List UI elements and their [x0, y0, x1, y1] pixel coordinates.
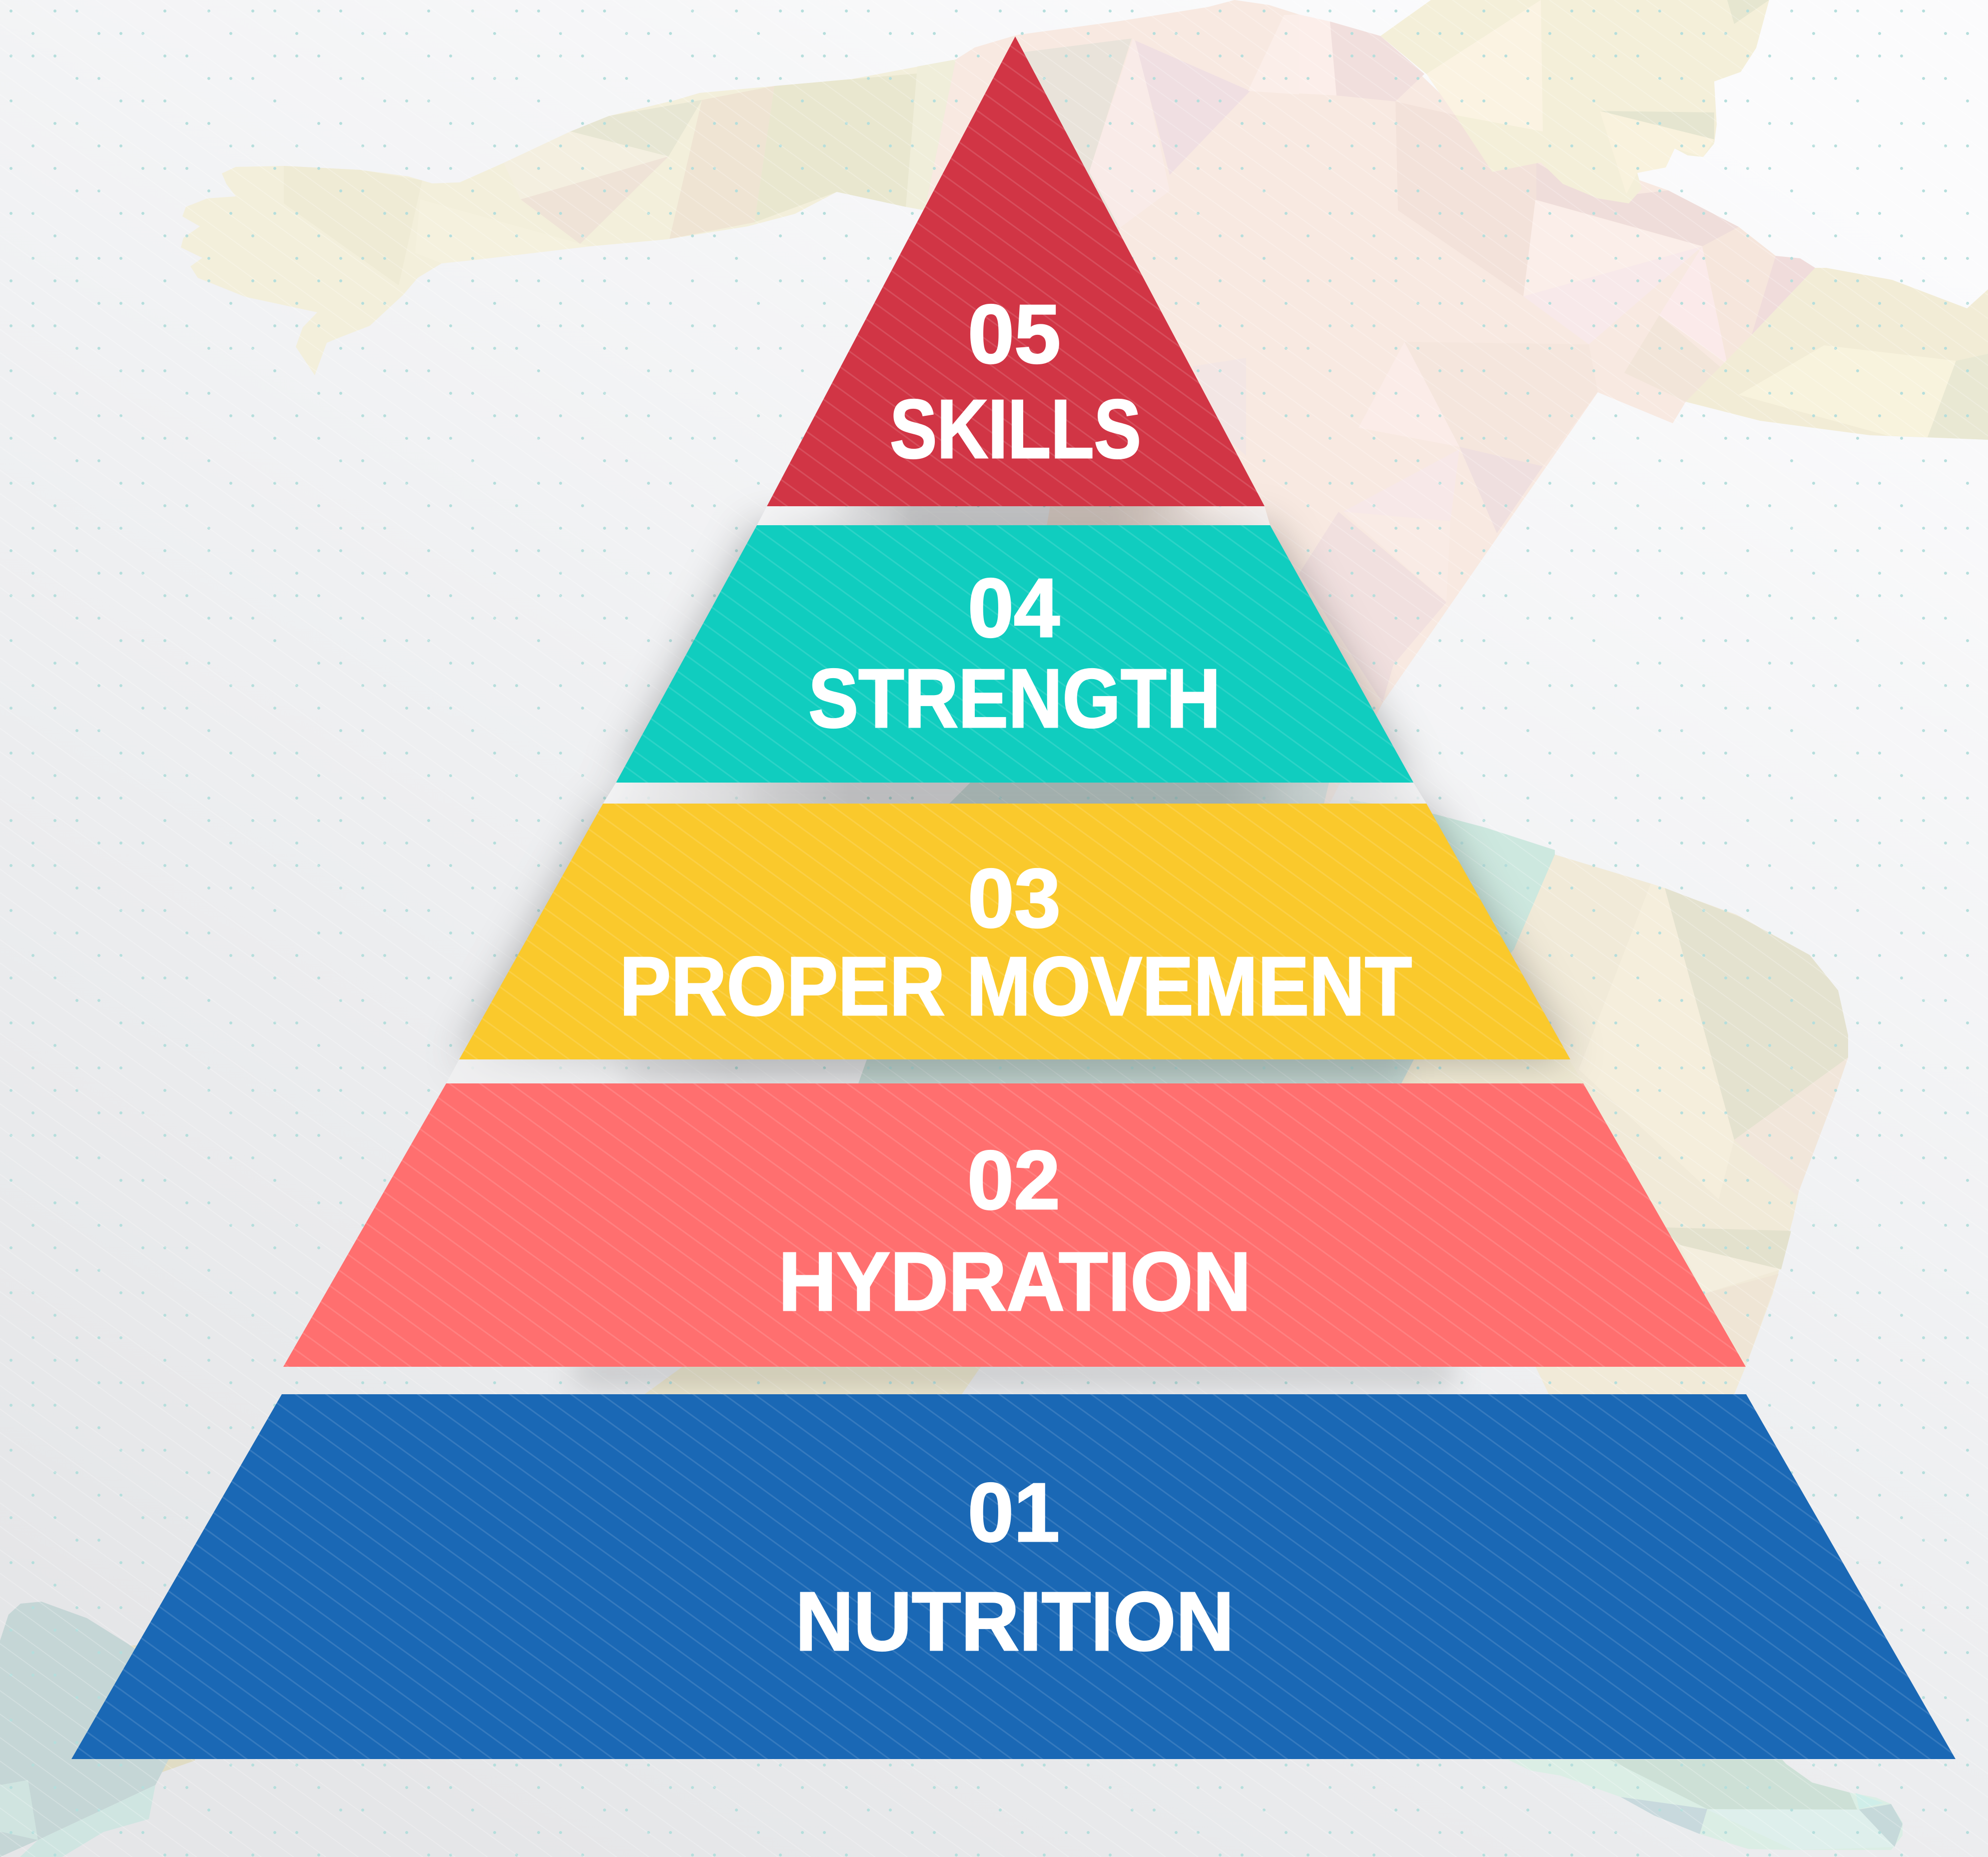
head and hair [1380, 0, 1769, 203]
gap highlights [446, 506, 1583, 1083]
front shoe [1508, 1760, 1903, 1850]
rear shoe [0, 1602, 200, 1857]
level 01: nutrition: NUTRITION [795, 1575, 1234, 1668]
level 02: hydration: 02 [967, 1134, 1060, 1227]
level 05: skills: 05 [968, 288, 1061, 381]
level 01: nutrition: 01 [968, 1466, 1060, 1559]
level 01: nutrition [71, 1394, 1956, 1759]
level 04: strength [616, 525, 1413, 783]
mid-body pieces seen through pyramid gaps [645, 783, 1584, 1394]
pyramid drop shadows [459, 200, 1570, 1382]
level 04: strength: 04 [968, 562, 1060, 655]
level 04: strength: STRENGTH [808, 652, 1221, 745]
level 03: proper movement [459, 804, 1570, 1059]
front arm and hand [181, 55, 999, 375]
level 02: hydration [283, 1083, 1746, 1367]
level 03: proper movement: PROPER MOVEMENT [620, 940, 1412, 1033]
front thigh and knee [1349, 800, 1848, 1394]
level 05: skills [767, 36, 1265, 506]
level 02: hydration: HYDRATION [778, 1235, 1251, 1328]
level 05: skills: SKILLS [890, 383, 1141, 476]
rear arm [1686, 268, 1988, 440]
torso [925, 0, 1815, 805]
level 03: proper movement: 03 [968, 852, 1061, 945]
